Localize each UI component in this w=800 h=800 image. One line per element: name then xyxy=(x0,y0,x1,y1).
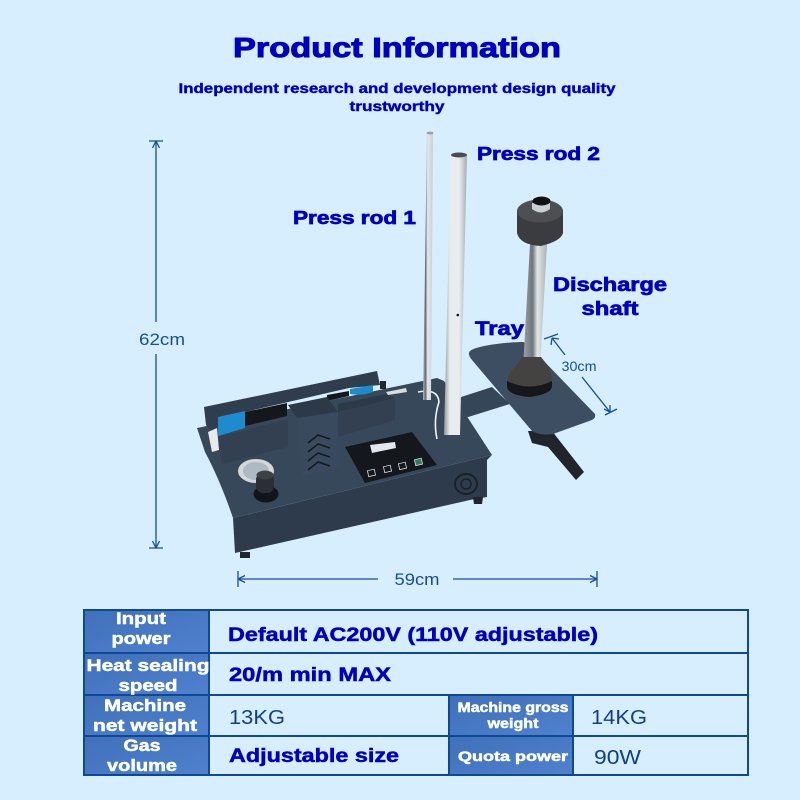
dimension: width 59cm xyxy=(238,570,597,589)
base feet xyxy=(240,497,483,558)
shaft top collar xyxy=(517,196,563,246)
table grid xyxy=(84,610,748,775)
row: gas volume and quota power: Quota power xyxy=(458,749,569,764)
heater cover xyxy=(288,397,339,477)
label: tray: Tray xyxy=(475,319,525,340)
heater housing front xyxy=(218,419,288,464)
row: heat sealing speed xyxy=(86,657,391,695)
subtitle xyxy=(178,81,616,114)
dimension: height 62cm: 62cm xyxy=(139,330,185,349)
silver fitting xyxy=(386,388,407,395)
row: gas volume and quota power: Adjustable size xyxy=(229,746,399,767)
specification table xyxy=(83,609,748,775)
rear housing xyxy=(204,371,380,437)
tray bracket xyxy=(528,431,584,480)
tray support arm xyxy=(455,387,510,418)
row: net and gross weight: weight xyxy=(486,716,539,731)
press rod 2 xyxy=(444,152,467,435)
press rod 1 xyxy=(423,132,434,400)
subtitle: trustworthy xyxy=(350,99,445,114)
base top plate xyxy=(197,378,492,518)
label: discharge shaft xyxy=(553,275,667,320)
row: heat sealing speed: Heat sealing xyxy=(86,657,210,675)
row: input power: Default AC200V (110V adjustable) xyxy=(228,625,598,646)
row: gas volume and quota power: Gas xyxy=(124,737,160,755)
row: input power: Input xyxy=(116,610,167,628)
label: press rod 1: Press rod 1 xyxy=(293,208,416,228)
white foam xyxy=(208,428,219,452)
row: gas volume and quota power xyxy=(107,737,641,775)
row: heat sealing speed: speed xyxy=(118,677,178,695)
row: net and gross weight: 14KG xyxy=(591,707,647,729)
base front face xyxy=(233,455,492,553)
control knob xyxy=(254,470,278,502)
row: net and gross weight: Machine gross xyxy=(458,700,568,715)
discharge shaft base xyxy=(507,357,552,397)
label: discharge shaft: shaft xyxy=(582,299,639,320)
row: gas volume and quota power: 90W xyxy=(594,747,641,769)
row: input power xyxy=(112,610,598,648)
table header cells xyxy=(83,609,573,775)
fan vent xyxy=(455,474,477,494)
title: Product Information xyxy=(233,32,561,63)
label: discharge shaft: Discharge xyxy=(553,275,667,296)
label: press rod 2: Press rod 2 xyxy=(477,144,600,164)
subtitle: Independent research and development design quality xyxy=(178,81,616,96)
dimension: height 62cm xyxy=(139,141,185,548)
row: net and gross weight: 13KG xyxy=(229,707,285,729)
dimension: tray 30cm: 30cm xyxy=(562,358,596,374)
row: gas volume and quota power: volume xyxy=(107,757,177,775)
row: net and gross weight: net weight xyxy=(93,717,198,735)
row: input power: power xyxy=(112,630,171,648)
row: net and gross weight: Machine xyxy=(104,697,186,715)
pressure gauge xyxy=(238,459,274,483)
blue rollers xyxy=(218,385,373,436)
machine xyxy=(197,132,595,558)
white cable xyxy=(418,391,439,439)
row: heat sealing speed: 20/m min MAX xyxy=(229,665,391,686)
discharge shaft xyxy=(523,244,547,368)
control panel xyxy=(345,432,437,483)
dimension: tray 30cm xyxy=(544,334,617,415)
dark knob fitting xyxy=(380,381,386,389)
row: net and gross weight xyxy=(93,697,647,735)
tray plate xyxy=(469,342,595,435)
dimension: width 59cm: 59cm xyxy=(394,570,440,589)
